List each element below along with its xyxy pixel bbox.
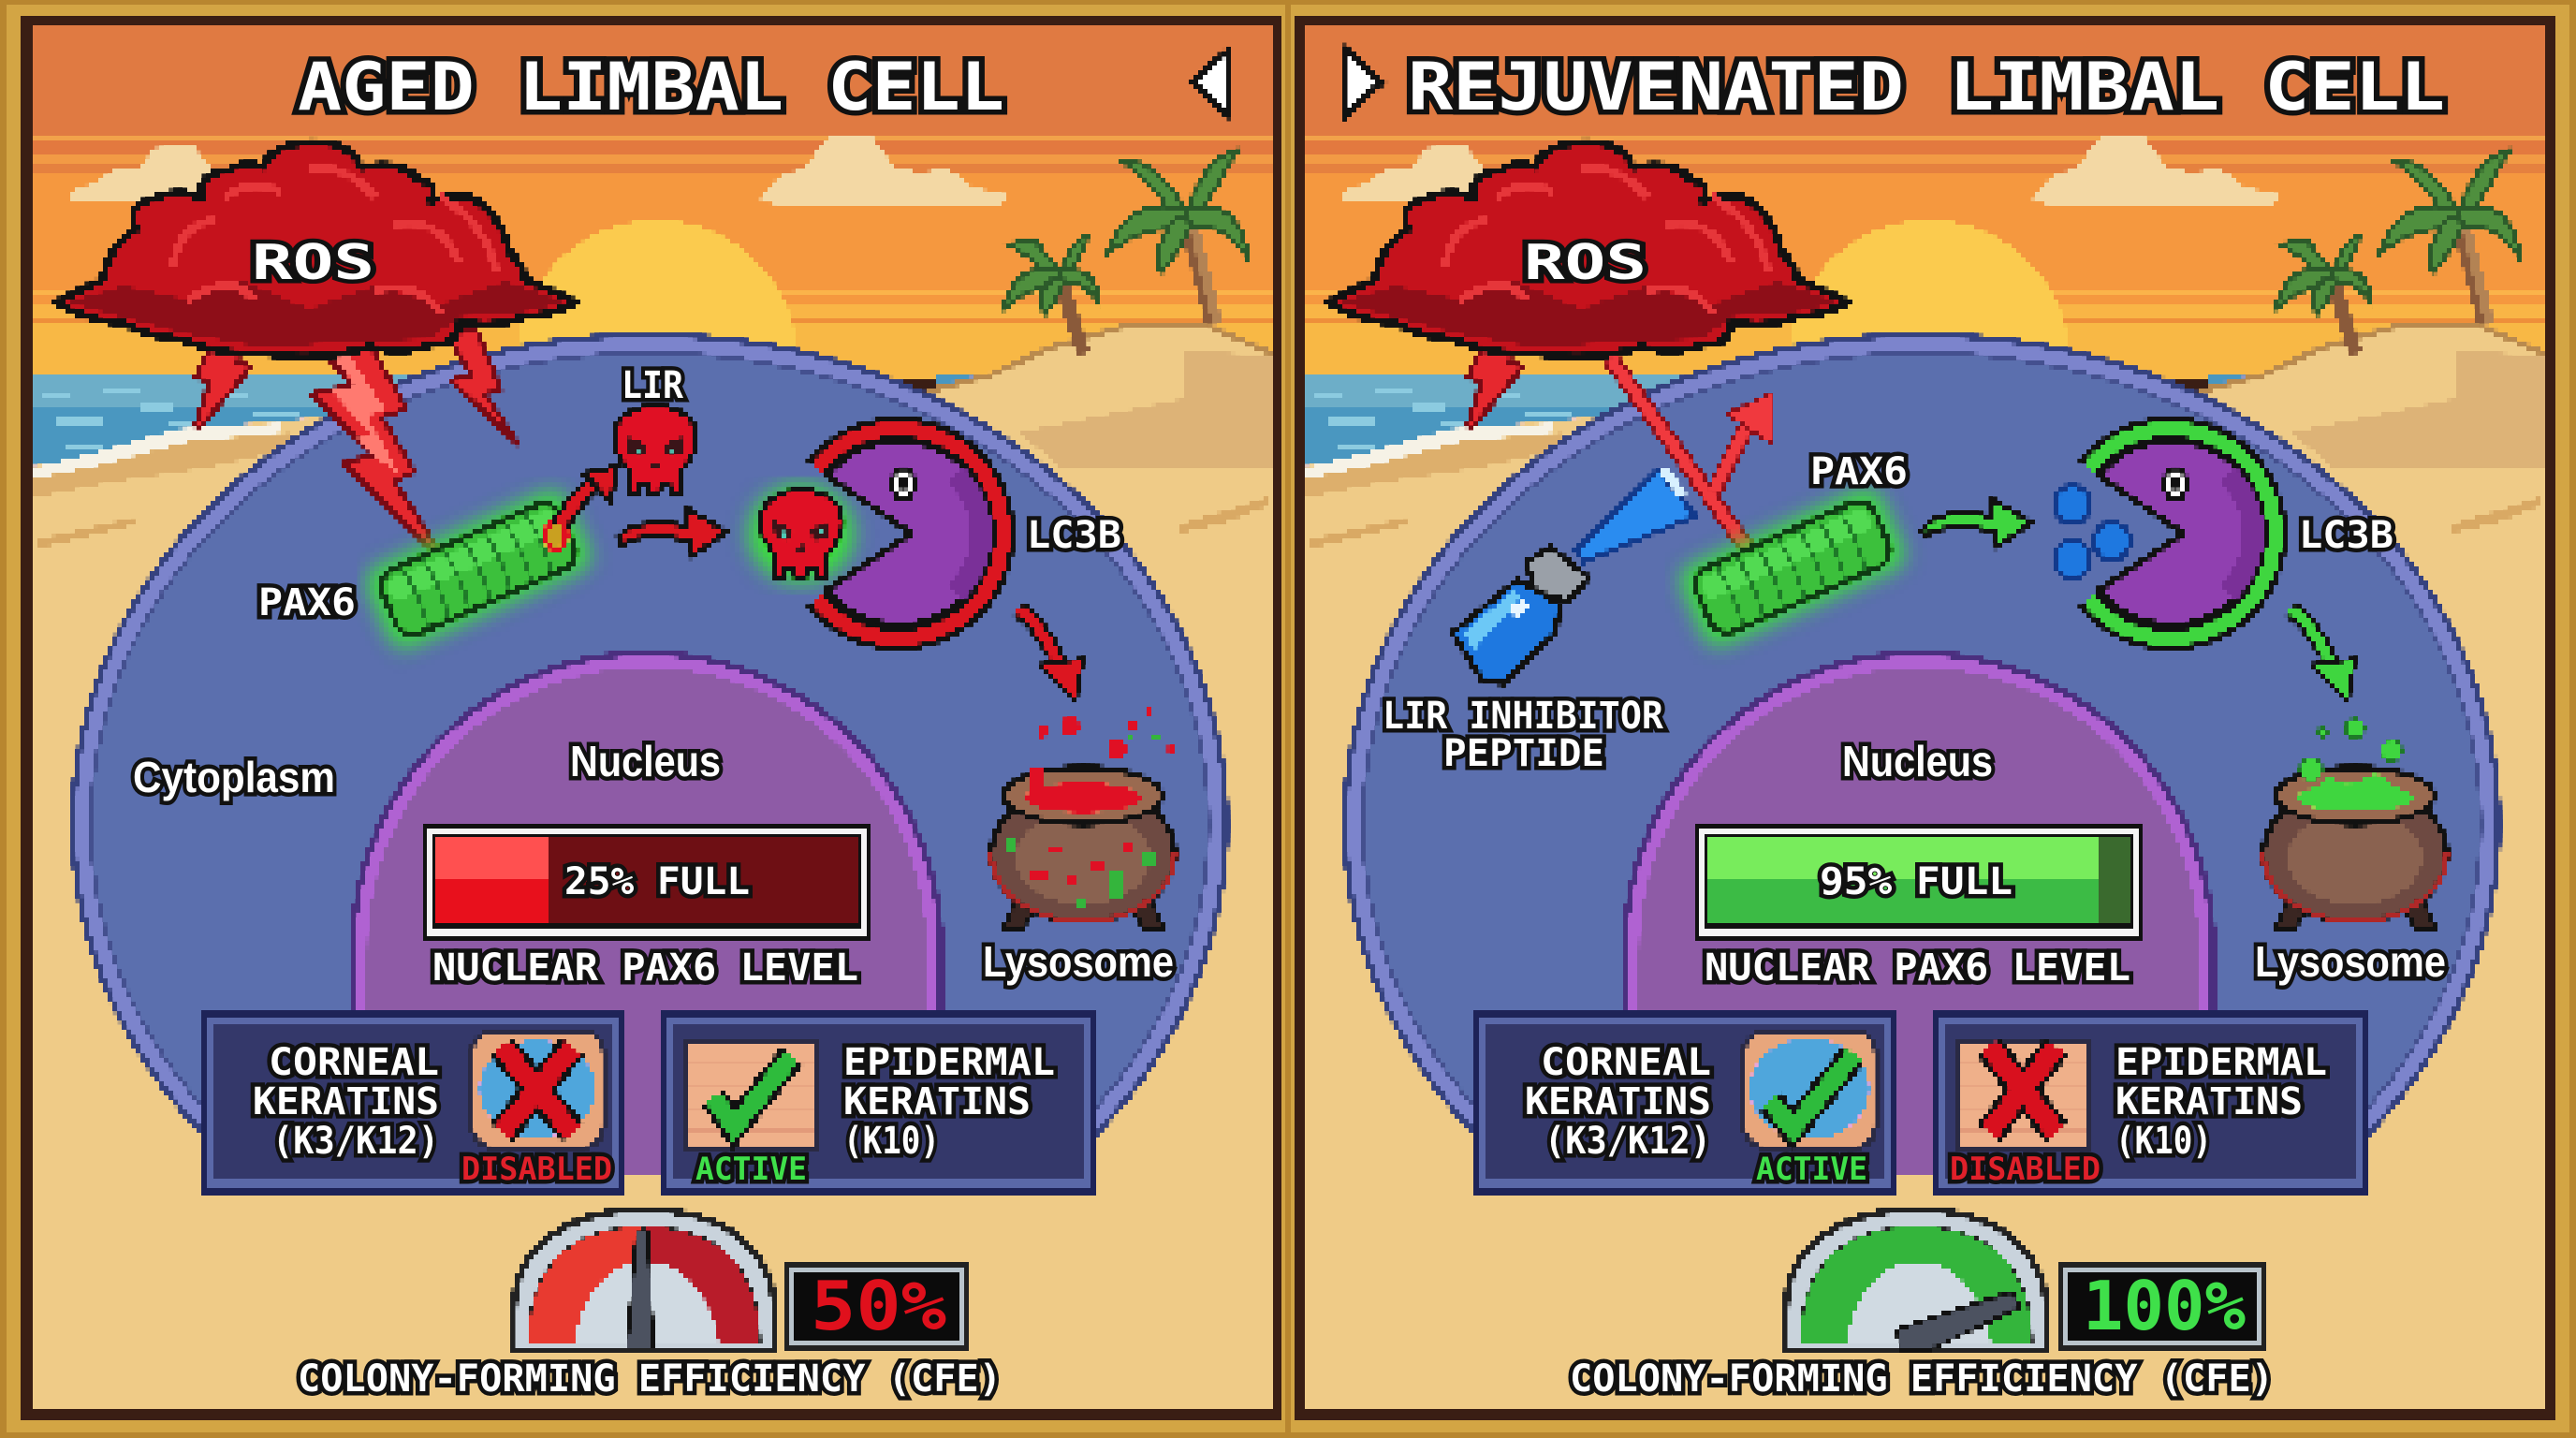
status: active: ACTIVE [695,1151,807,1188]
arrow: PAX6 to LC3B [1922,500,2031,547]
panel: corneal keratins [201,1010,624,1196]
label: nuclear PAX6 level: NUCLEAR PAX6 LEVEL [432,946,858,990]
arrow: LIR to autophagy [618,509,726,556]
readout: 100% [2058,1262,2266,1351]
text: epidermal keratins [843,1041,1055,1163]
label: colony-forming efficiency: COLONY-FORMING EFFICIENCY (CFE) [298,1357,1002,1401]
label: PAX6: PAX6 [1810,450,1908,493]
arrow: to lysosome [1018,609,1083,702]
text: epidermal keratins: EPIDERMAL [843,1041,1055,1084]
label: LC3B: LC3B [2299,514,2393,557]
label: Nucleus: Nucleus [1842,737,1993,785]
icon: ROS lightning bolts [196,330,519,568]
bar chart: nuclear PAX6 level 25% [423,824,871,941]
label: Lysosome: Lysosome [983,937,1174,986]
panel: epidermal keratins [661,1010,1096,1196]
label: nuclear PAX6 level: NUCLEAR PAX6 LEVEL [1705,946,2130,990]
text: corneal keratins: (K3/K12) [1544,1120,1711,1163]
panel: epidermal keratins [1933,1010,2368,1196]
label: ROS: ROS [252,235,374,291]
cell with cytoplasm and nucleus [1342,332,2501,1315]
label: Nucleus: Nucleus [570,737,721,785]
label: LIR inhibitor peptide [1383,695,1664,775]
title: aged limbal cell: AGED LIMBAL CELL [298,49,1004,125]
icon: lysosome cauldron with degraded contents [991,708,1177,929]
label: LIR inhibitor peptide: PEPTIDE [1443,732,1604,775]
icon: lysosome cauldron with green contents [2263,719,2447,929]
beach sunset background [1304,25,2545,1409]
icon: ROS storm cloud [1329,142,1847,357]
text: corneal keratins: KERATINS [253,1080,439,1123]
text: epidermal keratins: KERATINS [843,1080,1031,1123]
text: corneal keratins: CORNEAL [269,1041,439,1084]
arrow: deflected ROS beam [1600,344,1772,555]
beach sunset background [32,25,1273,1409]
label: colony-forming efficiency: COLONY-FORMING EFFICIENCY (CFE) [1570,1357,2274,1401]
cell with cytoplasm and nucleus [70,332,1231,1175]
arrow: to lysosome [2291,609,2355,702]
text: epidermal keratins: (K10) [2115,1120,2212,1163]
PAX6 protein [361,486,595,653]
icon: right pointer [1346,51,1382,114]
icon: ROS lightning bolt [1468,332,1523,426]
label: LC3B: LC3B [1027,514,1121,557]
text: epidermal keratins [2115,1041,2327,1163]
label: Lysosome: Lysosome [2255,937,2446,986]
panel: rejuvenated limbal cell [1295,16,2555,1420]
icon: LC3B pac-man, red ring [816,429,1003,638]
gauge: colony-forming efficiency 100% [1786,1210,2046,1350]
readout: 50%: 50% [811,1267,946,1345]
status: active: ACTIVE [1756,1151,1867,1188]
value: 25% full: 25% FULL [564,860,750,903]
text: epidermal keratins: EPIDERMAL [2115,1041,2327,1084]
PAX6 protein [1676,484,1910,651]
label: PAX6: PAX6 [258,581,356,624]
label: LIR: LIR [622,364,684,407]
arrow: PAX6 to LIR [560,466,618,526]
text: corneal keratins: KERATINS [1525,1080,1711,1123]
panel: corneal keratins [1473,1010,1896,1196]
text: epidermal keratins: (K10) [843,1120,940,1163]
panel: aged limbal cell [21,16,1281,1420]
readout: 100%: 100% [2083,1267,2246,1345]
icon: LIR skull [614,406,696,494]
text: corneal keratins [253,1041,439,1163]
icon: left pointer [1193,51,1228,114]
icon: cornea with red X [472,1031,604,1148]
icon: skin with green check [685,1040,817,1150]
icon: LIR inhibitor peptide vial [1453,466,1695,683]
icon: skin with red X [1957,1040,2089,1150]
icon: cornea with green check [1744,1031,1876,1148]
status: disabled: DISABLED [461,1151,612,1188]
title: rejuvenated limbal cell: REJUVENATED LIMBAL CELL [1408,49,2445,125]
icon: glowing skull substrate [749,485,854,582]
text: corneal keratins [1525,1041,1711,1163]
bar chart: nuclear PAX6 level 95% [1695,824,2143,941]
label: LIR inhibitor peptide: LIR INHIBITOR [1383,695,1664,738]
status: disabled: DISABLED [1950,1151,2100,1188]
readout: 50% [784,1262,969,1351]
text: corneal keratins: (K3/K12) [272,1120,439,1163]
value: 95% full: 95% FULL [1820,860,2012,903]
text: corneal keratins: CORNEAL [1541,1041,1711,1084]
label: ROS: ROS [1524,235,1647,291]
label: Cytoplasm: Cytoplasm [133,753,335,801]
text: epidermal keratins: KERATINS [2115,1080,2303,1123]
icon: LC3B pac-man, green ring [2088,429,2275,638]
gauge: colony-forming efficiency 50% [514,1210,774,1350]
icon: ROS storm cloud [57,142,575,357]
icon: peptide fragments [2055,486,2130,578]
